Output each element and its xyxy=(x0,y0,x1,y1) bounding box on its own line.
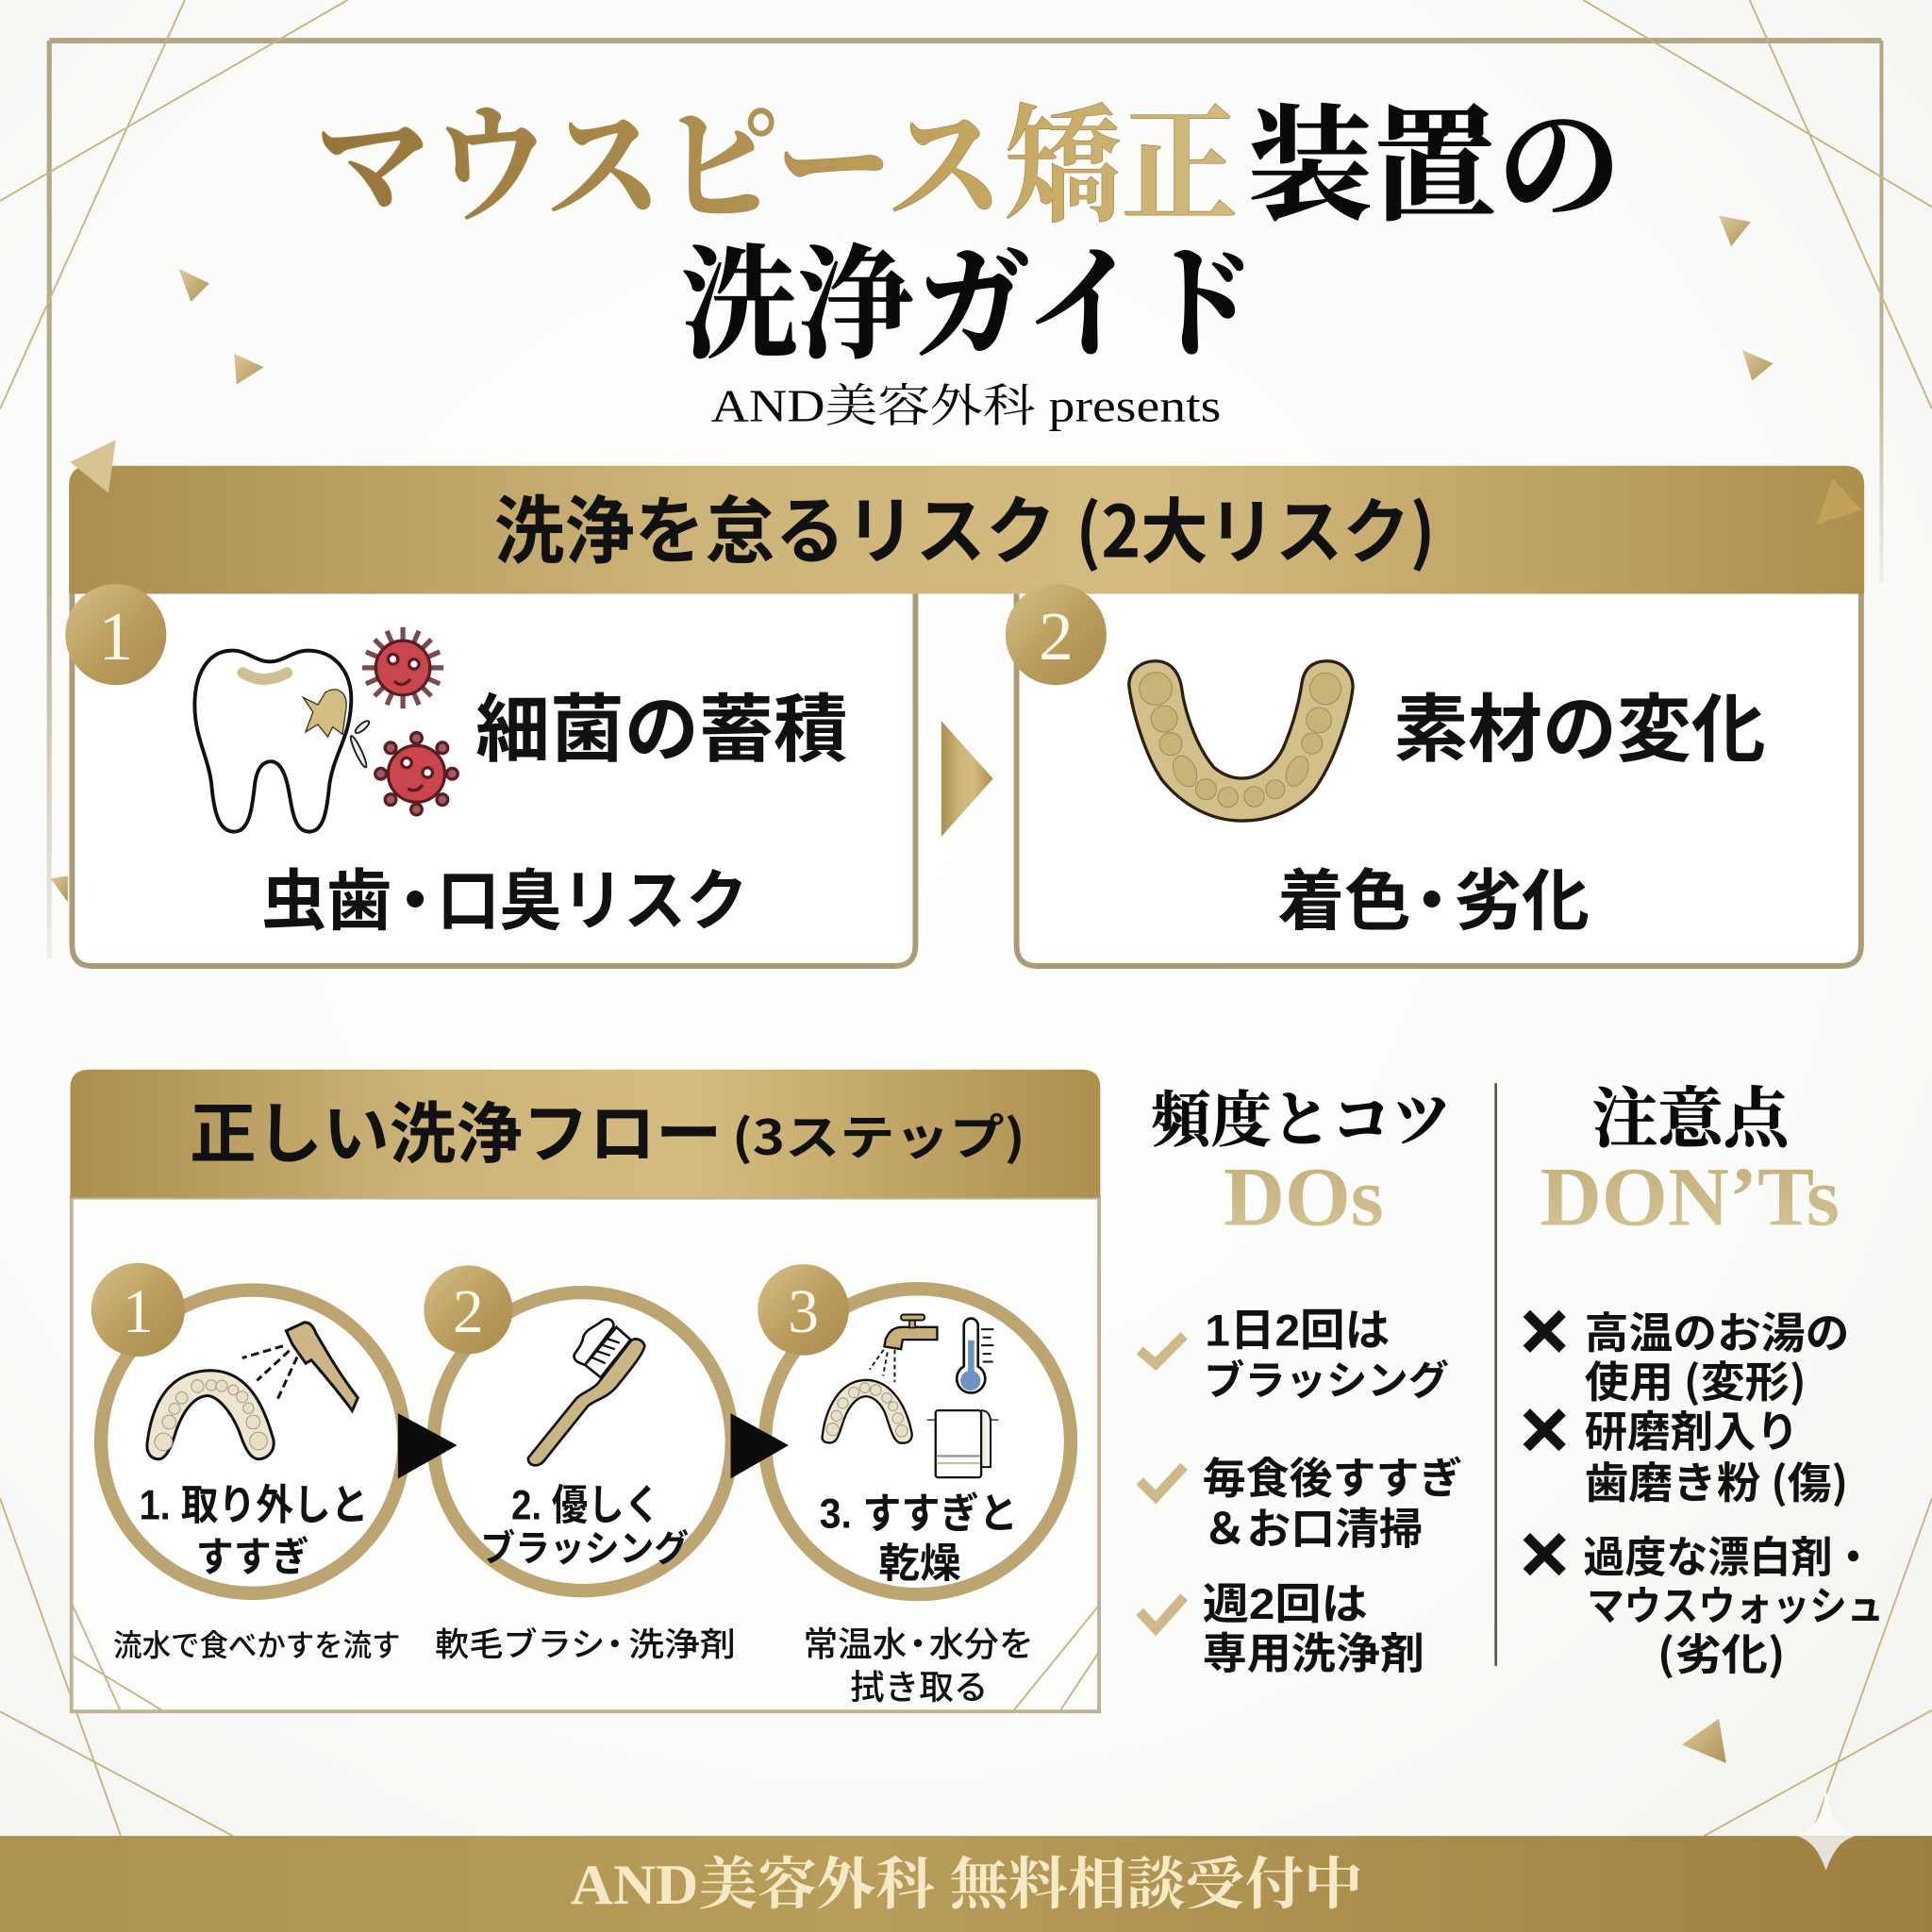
bacteria result: 口臭リスク xyxy=(438,848,748,944)
DON'T item 1: 使用 (変形) xyxy=(1585,1348,1807,1410)
step captions: 常温水 xyxy=(804,1616,907,1666)
material result: 着色 xyxy=(1277,848,1411,944)
DO item 2: 毎食後すすぎ xyxy=(1203,1444,1462,1507)
step captions: ・ xyxy=(901,1616,935,1666)
step 2 label xyxy=(480,1482,689,1573)
risks heading: (2大リスク) xyxy=(1075,474,1436,577)
risks header bar xyxy=(69,466,1864,594)
badge 1: 1 xyxy=(98,598,133,675)
DON'T item 3: マウスウォッシュ xyxy=(1587,1574,1884,1633)
step captions: 拭き取る xyxy=(850,1659,989,1709)
DON'T item 1: 高温のお湯の xyxy=(1585,1299,1849,1361)
DON'T item 2: 研磨剤入り xyxy=(1585,1397,1799,1459)
DO item 1 xyxy=(1140,1305,1449,1407)
panel: risks xyxy=(65,440,1864,966)
DOs heading xyxy=(1151,1087,1452,1243)
flow heading: (3ステップ) xyxy=(732,1099,1025,1169)
DO item 2: ＆お口清掃 xyxy=(1203,1495,1424,1557)
step captions: 軟毛ブラシ xyxy=(435,1618,605,1666)
card: material change xyxy=(1006,584,1861,966)
DON'T item 3 xyxy=(1526,1524,1884,1683)
risks heading xyxy=(494,471,1436,578)
badge step 2: 2 xyxy=(453,1278,484,1346)
DON'Ts heading xyxy=(1541,1082,1840,1243)
arrow: step 1 to 2 xyxy=(398,1413,458,1478)
DON'T item 1 xyxy=(1526,1299,1849,1410)
DON'Ts heading: 注意点 xyxy=(1592,1082,1793,1155)
step 3 label: 3. すすぎと xyxy=(820,1491,1018,1538)
DOs heading: 頻度とコツ xyxy=(1151,1087,1452,1154)
badge 2: 2 xyxy=(1039,598,1074,675)
material result: ・ xyxy=(1398,848,1465,944)
icon: stained mouthpiece xyxy=(1129,661,1353,821)
DO item 1: 1日2回は xyxy=(1205,1305,1390,1355)
DON'T item 2: 歯磨き粉 (傷) xyxy=(1585,1449,1848,1511)
badge step 3 xyxy=(758,1264,849,1356)
DON'T item 2 xyxy=(1526,1397,1848,1511)
panel: DON'Ts xyxy=(1526,1082,1884,1683)
footer text: AND美容外科 無料相談受付中 xyxy=(571,1853,1363,1916)
DO item 3: 週2回は xyxy=(1203,1580,1368,1628)
badge 1 xyxy=(65,584,166,685)
step captions xyxy=(113,1616,1034,1709)
icon: bacterium 1 xyxy=(362,627,443,708)
divider xyxy=(1495,1083,1497,1666)
sparkle xyxy=(1796,1789,1856,1871)
badge step 1: 1 xyxy=(123,1278,154,1346)
step 1 xyxy=(92,1263,404,1593)
step 1 label xyxy=(140,1482,369,1583)
material result xyxy=(1277,848,1590,944)
step 2 label: 2. 優しく xyxy=(511,1482,660,1528)
panel: DOs xyxy=(1140,1087,1462,1681)
title: 装置の xyxy=(1248,97,1622,237)
badge 2 xyxy=(1006,584,1107,685)
material label: 素材の変化 xyxy=(1393,670,1766,777)
step 1 label: 1. 取り外しと xyxy=(140,1482,369,1528)
badge step 1 xyxy=(92,1263,185,1357)
title xyxy=(314,97,1622,375)
risks heading: 洗浄を怠るリスク xyxy=(494,471,1056,578)
step 3 xyxy=(758,1264,1071,1594)
step 2 xyxy=(424,1265,732,1591)
material result: 劣化 xyxy=(1454,848,1590,944)
decorative gold triangles xyxy=(51,216,1774,1763)
bacteria label: 細菌の蓄積 xyxy=(475,670,848,777)
step captions: 水分を xyxy=(929,1616,1034,1666)
DON'T item 3: 過度な漂白剤・ xyxy=(1583,1524,1874,1586)
icon: bacterium 2 xyxy=(375,732,458,815)
title: 洗浄ガイド xyxy=(681,239,1258,375)
DOs heading: DOs xyxy=(1224,1151,1384,1243)
DO item 3 xyxy=(1140,1580,1424,1681)
footer bar xyxy=(0,1789,1932,1932)
arrow: step 2 to 3 xyxy=(731,1413,789,1478)
bacteria result xyxy=(261,848,748,944)
icon: toothbrush xyxy=(528,1319,644,1465)
step 2 label: ブラッシング xyxy=(480,1520,689,1573)
panel: cleaning flow xyxy=(70,1070,1100,1711)
corner lines inside flow panel xyxy=(73,1606,1098,1711)
triangle on header right xyxy=(1816,478,1862,525)
step captions: ・ xyxy=(598,1618,631,1666)
DO item 1: ブラッシング xyxy=(1204,1349,1449,1407)
flow heading xyxy=(190,1080,1025,1176)
icon: mouthpiece rinse xyxy=(147,1323,358,1459)
icon: faucet, thermometer, mouthpiece and towel xyxy=(823,1314,998,1477)
step captions: 流水で食べかすを流す xyxy=(113,1621,400,1665)
badge step 2 xyxy=(424,1265,512,1354)
arrow: risks xyxy=(941,721,993,837)
DO item 2 xyxy=(1140,1444,1462,1557)
bacteria result: 虫歯 xyxy=(261,848,391,944)
triangle on header left xyxy=(70,440,116,492)
flow body xyxy=(72,1198,1099,1711)
step 3 label xyxy=(820,1491,1018,1590)
DON'Ts heading: DON’Ts xyxy=(1541,1151,1840,1243)
badge step 3: 3 xyxy=(788,1278,819,1346)
subtitle: AND美容外科 presents xyxy=(711,382,1221,432)
DON'T item 3: (劣化) xyxy=(1657,1621,1786,1683)
card: bacteria risk xyxy=(65,584,915,966)
flow header bar xyxy=(70,1070,1100,1198)
bacteria result: ・ xyxy=(382,848,448,944)
DO item 3: 専用洗浄剤 xyxy=(1203,1619,1424,1681)
step 3 label: 乾燥 xyxy=(878,1531,961,1590)
step captions: 洗浄剤 xyxy=(628,1618,736,1666)
step 1 label: すすぎ xyxy=(196,1524,309,1583)
flow heading: 正しい洗浄フロー xyxy=(190,1080,722,1176)
title: マウスピース矯正 xyxy=(314,97,1239,239)
icon: tooth with decay xyxy=(194,651,371,832)
